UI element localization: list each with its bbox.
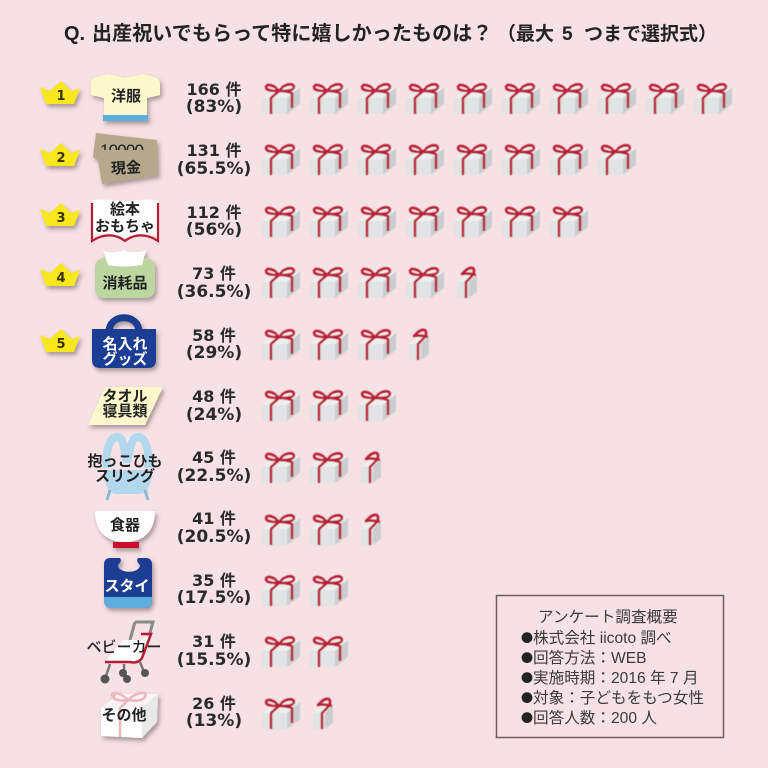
icon: sling	[87, 437, 163, 500]
row 3: picture books and toys, 112	[40, 200, 588, 241]
survey details: 株式会社 iicoto 調べ	[533, 629, 672, 647]
icon: t-shirt	[91, 74, 160, 121]
count label: 26 件	[192, 694, 236, 713]
gift icons	[262, 576, 348, 606]
gift icons	[262, 330, 429, 360]
count label	[177, 632, 251, 670]
row 7: baby carrier and sling, 45	[87, 437, 381, 500]
icon: tissue box	[95, 250, 155, 298]
icon: bib: スタイ	[104, 578, 150, 595]
row 2: cash, 131	[40, 133, 636, 184]
row 4: consumables, 73	[40, 250, 477, 302]
gift icons	[262, 84, 732, 114]
survey details: ●	[521, 709, 533, 726]
icon: bib	[104, 558, 152, 608]
count label: 48 件	[192, 387, 236, 406]
icon: banknote: 現金	[111, 158, 141, 178]
count label: 35 件	[192, 571, 236, 590]
survey details: 対象：子どもをもつ女性	[533, 689, 704, 707]
count label: 31 件	[192, 632, 236, 651]
panel: survey overview	[496, 596, 724, 738]
row 5: personalised goods, 58	[40, 318, 429, 368]
survey details: ●	[521, 689, 533, 706]
icon: stroller	[86, 622, 162, 684]
title: （最大	[497, 24, 554, 45]
survey details: 回答人数：200 人	[533, 709, 657, 727]
count label	[186, 387, 242, 425]
row 11: other, 26	[101, 693, 333, 738]
row 10: stroller, 31	[86, 622, 348, 684]
icon: navy bag	[92, 318, 156, 368]
icon: towel: 寝具類	[102, 402, 148, 420]
gift icons	[262, 637, 348, 667]
title: 出産祝いでもらって特に嬉しかったものは？	[92, 22, 492, 45]
count label: (36.5%)	[177, 282, 251, 302]
icon: banknote: 10000	[100, 141, 144, 160]
row 8: tableware, 41	[95, 509, 381, 548]
count label: 112 件	[187, 203, 241, 222]
rank crown 3: 3	[56, 211, 66, 226]
icon: t-shirt: 洋服	[111, 87, 141, 105]
gift icons	[262, 207, 588, 237]
survey details: ●	[521, 669, 533, 686]
panel heading: アンケート調査概要	[538, 608, 678, 626]
count label	[177, 509, 251, 547]
count label: (22.5%)	[177, 466, 251, 486]
count label: (83%)	[186, 97, 242, 117]
count label: (15.5%)	[177, 650, 251, 670]
rank crown 2: 2	[56, 151, 66, 166]
title: 5	[562, 24, 573, 45]
count label	[177, 448, 251, 486]
gift icons	[262, 453, 381, 483]
count label	[177, 571, 251, 608]
survey details: ●	[521, 629, 533, 646]
count label	[186, 694, 242, 731]
icon: sling: スリング	[95, 467, 155, 485]
icon: towel	[88, 387, 163, 425]
title: Q.	[64, 23, 85, 45]
icon: open book: おもちゃ	[95, 218, 155, 235]
icon: banknote	[93, 133, 158, 184]
count label: 58 件	[192, 326, 236, 345]
gift icons	[262, 699, 333, 729]
rank crown 3	[40, 203, 80, 226]
count label	[177, 141, 251, 179]
rank crown 1	[40, 81, 80, 104]
count label: (13%)	[186, 711, 242, 731]
gift icons	[262, 391, 396, 421]
count label: (56%)	[186, 220, 242, 240]
title	[64, 22, 717, 45]
survey details	[521, 629, 704, 727]
count label: 73 件	[192, 264, 236, 283]
rank crown 5	[40, 329, 80, 352]
row 6: towels and bedding, 48	[88, 387, 396, 425]
icon: large gift box: その他	[101, 707, 147, 724]
count label: (29%)	[186, 343, 242, 363]
row 9: bibs, 35	[104, 558, 348, 608]
gift icons	[262, 268, 477, 298]
survey details: 実施時期：2016 年 7 月	[533, 669, 699, 687]
icon: tissue box: 消耗品	[102, 274, 148, 292]
rank crown 5: 5	[56, 337, 66, 352]
title: つまで選択式）	[584, 23, 717, 45]
icon: towel: タオル	[102, 388, 148, 405]
count label	[177, 264, 251, 302]
icon: navy bag: 名入れ	[102, 335, 148, 353]
count label: (65.5%)	[177, 159, 251, 179]
survey details: 回答方法：WEB	[533, 649, 647, 667]
survey details: ●	[521, 649, 533, 666]
rank crown 4: 4	[56, 271, 66, 286]
count label: 45 件	[192, 448, 236, 467]
rank crown 4	[40, 263, 80, 286]
icon: navy bag: グッズ	[102, 350, 148, 368]
count label: (17.5%)	[177, 588, 251, 608]
icon: open book: 絵本	[110, 201, 140, 218]
icon: stroller: ベビーカー	[86, 639, 162, 656]
rank crown 1: 1	[56, 89, 66, 104]
count label	[186, 80, 242, 117]
icon: large gift box	[101, 693, 158, 738]
count label	[186, 326, 242, 363]
count label: 41 件	[192, 509, 236, 528]
gift icons	[262, 145, 636, 175]
count label: 131 件	[187, 141, 241, 160]
count label	[186, 203, 242, 240]
icon: bowl: 食器	[110, 516, 140, 534]
count label: (24%)	[186, 405, 242, 425]
row 1: clothes, 166	[40, 74, 732, 121]
count label: 166 件	[187, 80, 241, 99]
icon: sling: 抱っこひも	[87, 452, 163, 470]
icon: open book	[92, 200, 158, 241]
rank crown 2	[40, 143, 80, 166]
icon: bowl	[95, 511, 155, 548]
count label: (20.5%)	[177, 527, 251, 547]
gift icons	[262, 515, 381, 545]
